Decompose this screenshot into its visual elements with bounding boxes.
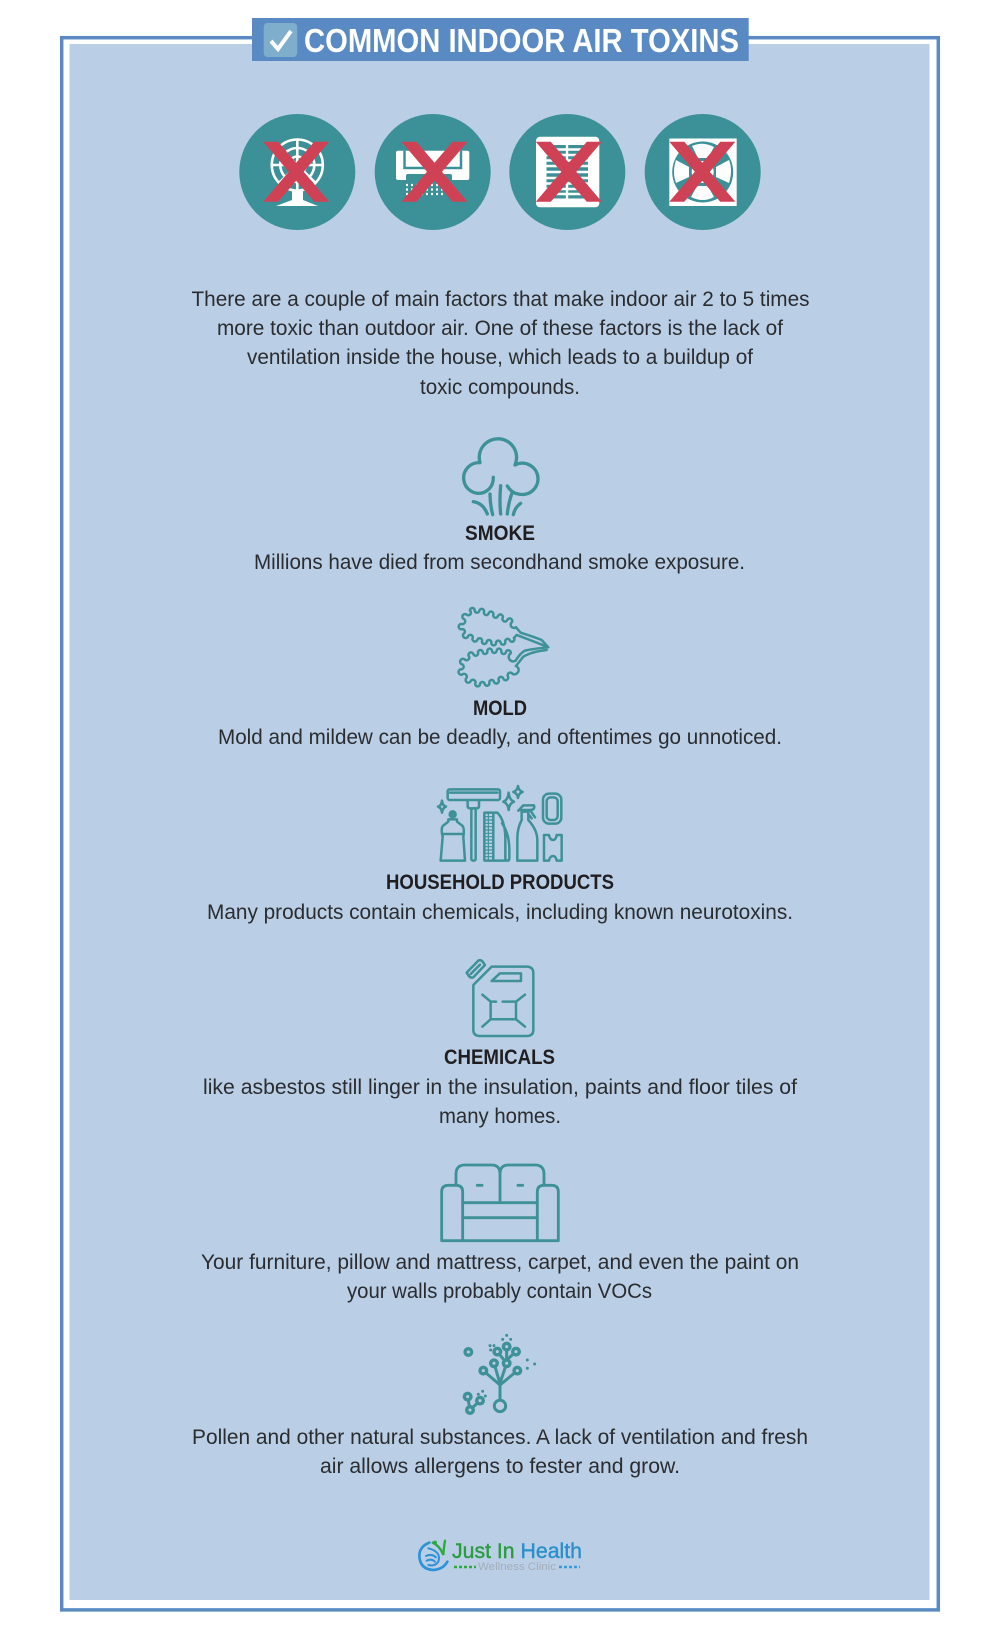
logo — [419, 1540, 582, 1573]
section: chemicals — [203, 960, 797, 1128]
description: like asbestos still linger in the insulation, paints and floor tiles of — [203, 1076, 797, 1099]
title banner — [252, 18, 749, 61]
icon: crossed air conditioner — [375, 114, 491, 230]
icon: logo swirl — [419, 1541, 447, 1570]
description: Many products contain chemicals, including known neurotoxins. — [207, 901, 793, 924]
section: household products — [207, 786, 793, 924]
section: allergens — [192, 1334, 808, 1478]
heading: SMOKE — [465, 522, 535, 545]
heading: HOUSEHOLD PRODUCTS — [386, 871, 614, 894]
title: COMMON INDOOR AIR TOXINS — [304, 22, 739, 59]
intro paragraph — [192, 288, 810, 399]
icon: pollen branch — [463, 1334, 536, 1415]
intro paragraph: ventilation inside the house, which leads to a buildup of — [247, 346, 753, 369]
icon: crossed desk fan — [239, 114, 355, 230]
description: Mold and mildew can be deadly, and oftentimes go unnoticed. — [218, 726, 782, 749]
tagline: Wellness Clinic — [478, 1561, 557, 1573]
icon: cleaning products — [438, 786, 562, 861]
section: furniture — [201, 1165, 799, 1303]
description continued: your walls probably contain VOCs — [347, 1280, 652, 1303]
heading: CHEMICALS — [444, 1046, 555, 1069]
section: mold — [218, 608, 782, 749]
description continued: air allows allergens to fester and grow. — [320, 1455, 680, 1478]
intro paragraph: more toxic than outdoor air. One of these factors is the lack of — [217, 317, 783, 340]
icon: smoke cloud — [464, 439, 538, 515]
intro paragraph: There are a couple of main factors that make indoor air 2 to 5 times — [192, 288, 810, 311]
heading: MOLD — [473, 697, 527, 720]
icon: checkbox — [264, 23, 297, 57]
icon: jerry can — [467, 960, 533, 1036]
brand name: Just In Health — [452, 1540, 582, 1563]
description: Pollen and other natural substances. A lack of ventilation and fresh — [192, 1426, 808, 1449]
description: Your furniture, pillow and mattress, carpet, and even the paint on — [201, 1251, 799, 1274]
icon row: no ventilation — [239, 114, 761, 230]
description continued: many homes. — [439, 1105, 561, 1128]
section: smoke — [254, 439, 745, 574]
tagline dots — [454, 1566, 580, 1568]
icon: crossed box fan — [645, 114, 761, 230]
icon: sofa — [442, 1165, 558, 1241]
icon: crossed wall vent — [509, 114, 625, 230]
description: Millions have died from secondhand smoke exposure. — [254, 551, 745, 574]
intro paragraph: toxic compounds. — [420, 376, 580, 399]
icon: mold leaves — [459, 608, 548, 686]
